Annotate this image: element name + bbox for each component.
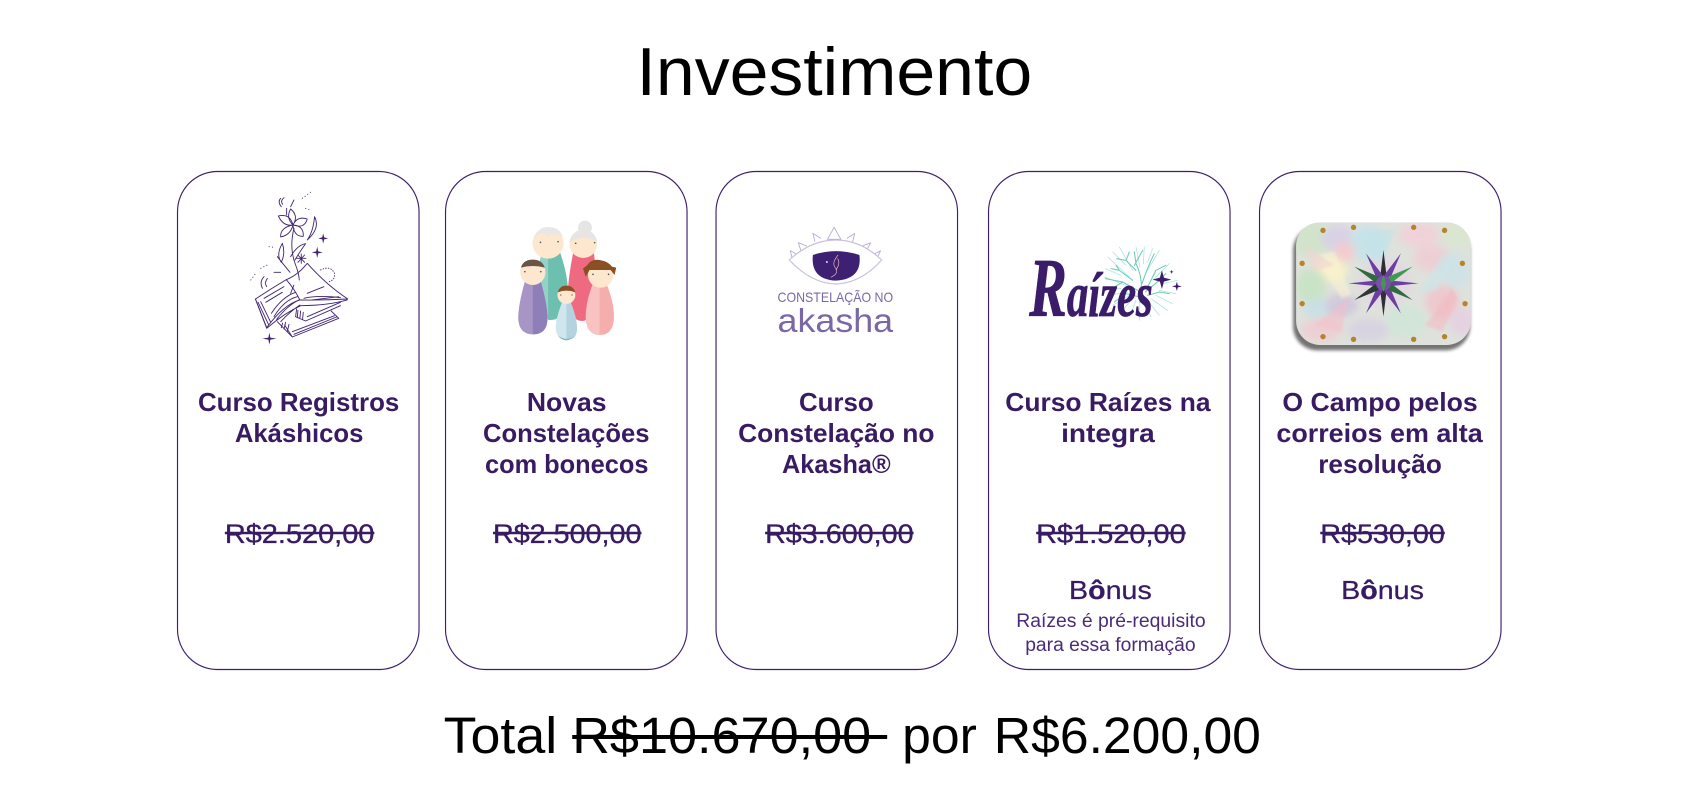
logo script word: akasha (778, 302, 894, 339)
heading (738, 389, 935, 479)
icon: family of wooden dolls (518, 221, 616, 340)
sparkles (262, 233, 328, 345)
heading: Constelação no (738, 420, 935, 448)
star (1349, 250, 1418, 317)
heading (1276, 389, 1483, 479)
heading: correios em alta (1276, 420, 1483, 448)
prerequisite note (1016, 611, 1206, 656)
card outline (716, 172, 958, 670)
heading: com bonecos (485, 451, 648, 479)
old price: R$2.500,00 (493, 519, 641, 549)
heading (1005, 389, 1211, 448)
heading: Constelações (483, 420, 649, 448)
icon: iridescent field board with star (1288, 222, 1476, 350)
panel: Curso Constelação no Akasha (716, 172, 958, 670)
heading: resolução (1318, 451, 1442, 479)
heading: Akasha® (782, 451, 891, 479)
bonus label: Bônus (1069, 577, 1152, 605)
heading: Curso (799, 389, 874, 417)
heading: Curso Registros (198, 389, 399, 417)
infographic (176, 46, 1502, 764)
card outline (1260, 172, 1501, 670)
card outline (446, 172, 687, 670)
logo wordmark: CONSTELAÇÃO NO (778, 289, 893, 305)
card outline (989, 172, 1230, 670)
coral tree (1104, 247, 1182, 320)
panel: Curso Registros Akáshicos (178, 172, 419, 670)
icon: Raízes logo (1029, 242, 1182, 335)
heading: Akáshicos (235, 420, 363, 448)
title: Investimento (636, 35, 1032, 110)
panel: Curso Raízes na integra (989, 172, 1230, 670)
bonus label: Bônus (1341, 577, 1424, 605)
prerequisite note: para essa formação (1025, 635, 1196, 656)
total label: Total (444, 707, 557, 764)
gold markers (1299, 225, 1468, 342)
script word: Raízes (1029, 242, 1153, 335)
icon: open books with flower (251, 191, 348, 345)
eye symbol (789, 227, 882, 284)
heading: O Campo pelos (1282, 389, 1478, 417)
struck total: R$10.670,00 (572, 707, 871, 764)
old price: R$2.520,00 (225, 519, 374, 549)
card outline (178, 172, 419, 670)
panel: Novas Constelações com bonecos (446, 172, 687, 670)
old price: R$3.600,00 (765, 519, 914, 549)
page content (178, 35, 1501, 764)
total price line (444, 707, 1261, 764)
old price: R$1.520,00 (1036, 519, 1186, 549)
final price: R$6.200,00 (994, 707, 1261, 764)
panel: O Campo pelos correios (1260, 172, 1501, 670)
heading: Curso Raízes na (1005, 389, 1211, 417)
por label: por (902, 707, 977, 764)
icon: Constelação no Akasha logo (778, 227, 894, 339)
strikethrough (572, 735, 887, 739)
old price: R$530,00 (1320, 519, 1445, 549)
heading: integra (1061, 420, 1155, 448)
heading: Novas (527, 389, 607, 417)
heading (198, 389, 399, 448)
heading (483, 389, 649, 479)
prerequisite note: Raízes é pré-requisito (1016, 611, 1206, 632)
